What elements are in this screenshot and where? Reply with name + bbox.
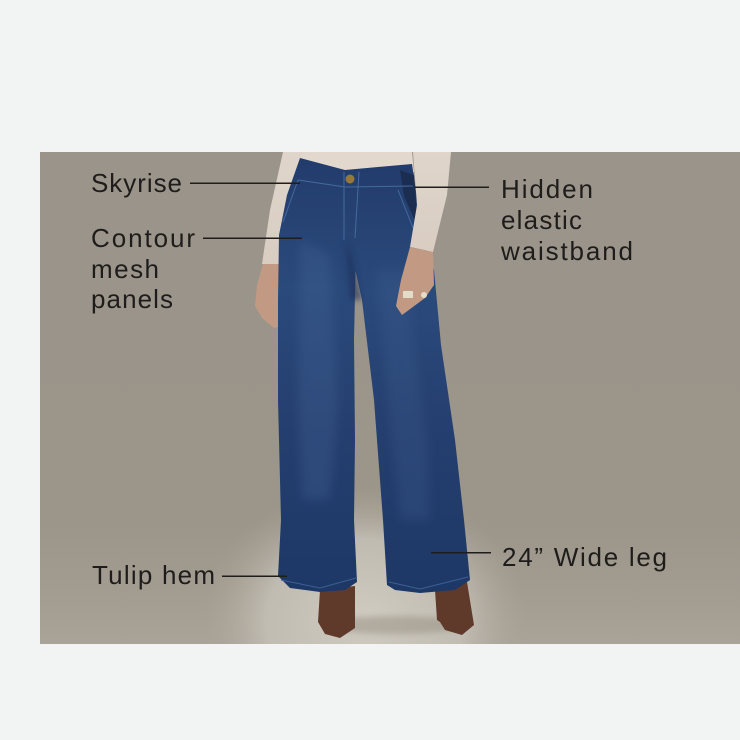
left sleeve xyxy=(262,152,303,265)
callout: Hidden elastic waistband: Hidden xyxy=(501,174,593,204)
infographic xyxy=(40,152,740,644)
waistband and hem stitching xyxy=(283,172,413,240)
callout: Hidden elastic waistband: waistband xyxy=(500,236,633,266)
callout: 24 inch wide leg: 24” Wide leg xyxy=(502,542,667,572)
right hand xyxy=(396,247,434,315)
callout: Contour mesh panels: Contour xyxy=(91,223,195,253)
callout: Contour mesh panels: mesh xyxy=(91,254,159,284)
model figure wearing jeans xyxy=(255,152,474,638)
left jeans leg xyxy=(278,158,357,592)
callout: Contour mesh panels xyxy=(91,223,302,314)
callout: Skyrise: Skyrise xyxy=(91,168,182,198)
callout: Tulip hem: Tulip hem xyxy=(92,560,215,590)
denim shading xyxy=(298,170,430,520)
rings xyxy=(403,291,427,298)
right jeans leg xyxy=(345,164,470,593)
torso top xyxy=(298,152,414,172)
callout: Hidden elastic waistband: elastic xyxy=(501,205,582,235)
right sleeve xyxy=(410,152,451,252)
left hand xyxy=(255,264,282,328)
boots xyxy=(318,582,474,638)
waist button xyxy=(346,174,354,184)
photo backdrop panel xyxy=(40,152,740,644)
callout: Hidden elastic waistband xyxy=(415,174,633,266)
callout: Contour mesh panels: panels xyxy=(91,284,173,314)
